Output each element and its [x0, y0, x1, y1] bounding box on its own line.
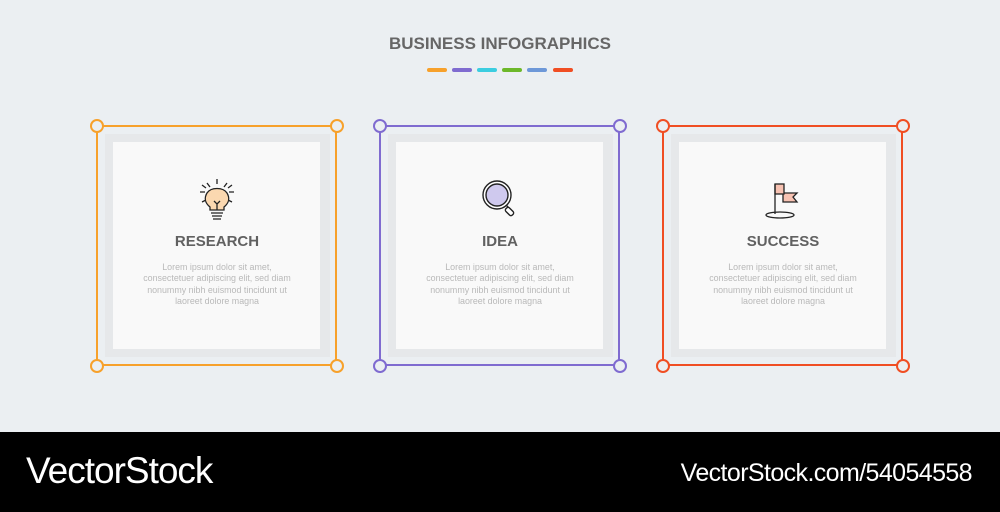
- icon: flag: [765, 183, 798, 219]
- text block: [426, 262, 574, 306]
- panel: research: [90, 119, 344, 373]
- text block: [143, 262, 291, 306]
- icon: light bulb: [200, 179, 234, 220]
- footer logo: VectorStock: [26, 450, 212, 491]
- heading: idea: IDEA: [482, 233, 518, 250]
- text block: consectetuer adipiscing elit, sed diam: [426, 273, 574, 283]
- footer url: VectorStock.com/54054558: [681, 459, 972, 487]
- text block: consectetuer adipiscing elit, sed diam: [143, 273, 291, 283]
- title: BUSINESS INFOGRAPHICS: [389, 34, 611, 53]
- heading: success: SUCCESS: [747, 233, 819, 250]
- text block: nonummy nibh euismod tincidunt ut: [430, 285, 570, 295]
- text block: [709, 262, 857, 306]
- text block: Lorem ipsum dolor sit amet,: [162, 262, 272, 272]
- text block: laoreet dolore magna: [741, 296, 825, 306]
- color dashes: [427, 68, 573, 72]
- footer bar: [0, 432, 1000, 512]
- panel: success: [656, 119, 910, 373]
- text block: Lorem ipsum dolor sit amet,: [728, 262, 838, 272]
- heading: research: RESEARCH: [175, 233, 259, 250]
- text block: nonummy nibh euismod tincidunt ut: [713, 285, 853, 295]
- icon: magnifier: [482, 180, 514, 216]
- panel: idea: [373, 119, 627, 373]
- text block: laoreet dolore magna: [458, 296, 542, 306]
- text block: consectetuer adipiscing elit, sed diam: [709, 273, 857, 283]
- text block: Lorem ipsum dolor sit amet,: [445, 262, 555, 272]
- text block: laoreet dolore magna: [175, 296, 259, 306]
- text block: nonummy nibh euismod tincidunt ut: [147, 285, 287, 295]
